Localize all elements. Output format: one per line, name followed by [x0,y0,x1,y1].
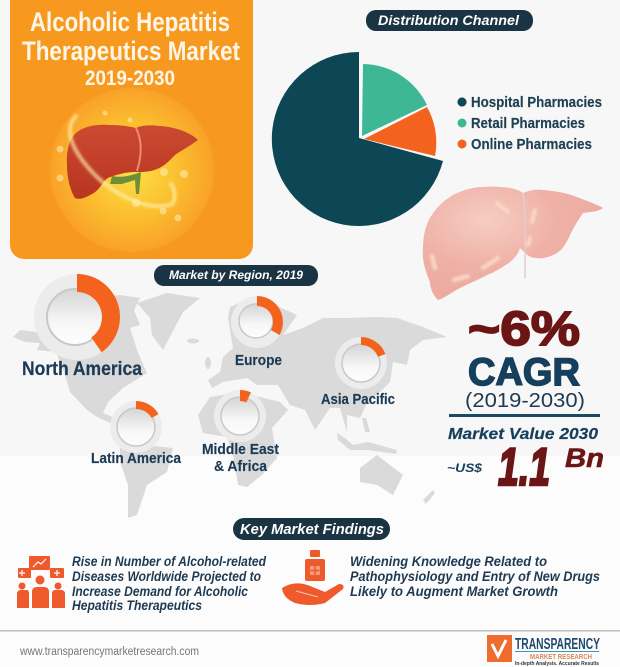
donut: North America [34,274,120,360]
logo: In-depth Analysis. Accurate Results [515,661,599,667]
label: Europe: Europe [235,352,282,369]
stat: market value: 1.1 [498,438,550,497]
logo: MARKET RESEARCH [530,654,592,661]
label: Middle East and Africa: & Africa [214,458,268,475]
finding text: right: Likely to Augment Market Growth [350,584,558,599]
illustration: pale liver [423,187,603,300]
label: Middle East and Africa [202,441,279,475]
title text: Alcoholic Hepatitis [30,7,230,37]
pie chart [272,52,443,226]
label: North America: North America [22,358,142,380]
donut: Latin America [110,401,162,453]
title text: Therapeutics Market [22,36,240,66]
donut: Europe [231,296,283,348]
label: Asia Pacific: Asia Pacific [321,391,395,408]
panel: title [10,0,253,259]
heading: market by region: Market by Region, 2019 [169,268,303,282]
finding text: left: Diseases Worldwide Projected to [72,569,261,584]
finding text: left: Hepatitis Therapeutics [72,598,202,613]
icon: liver [67,116,198,206]
world map [13,293,447,518]
stat: market value: Bn [565,443,604,473]
finding text: left: Rise in Number of Alcohol-related [72,554,267,569]
heading: market by region [154,265,318,286]
logo [487,635,600,667]
heading: distribution channel [366,10,533,31]
legend: Online Pharmacies [471,137,592,153]
label: Middle East and Africa: Middle East [202,441,279,458]
stat: CAGR: ~6% [468,303,580,356]
finding text: right: Widening Knowledge Related to [350,554,547,569]
finding text: right: Pathophysiology and Entry of New Drugs [350,569,600,584]
stat: market value: Market Value 2030 [448,426,598,443]
icon: sparkles [56,110,188,222]
footer url: www.transparencymarketresearch.com [19,646,199,658]
icon: people with chart [17,556,65,608]
stat: market value: ~US$ [447,461,482,475]
title text: 2019-2030 [85,67,175,90]
stat: CAGR: (2019-2030) [465,390,585,412]
finding text: left [72,554,267,613]
stat: CAGR [449,303,600,417]
stat: market value [447,426,604,497]
icon: hand with bottle [282,550,344,605]
stat: CAGR: CAGR [468,351,580,394]
legend: Retail Pharmacies [471,116,585,132]
donut: Asia Pacific [335,337,387,389]
legend: Hospital Pharmacies [471,95,602,111]
finding text: left: Increase Demand for Alcoholic [72,584,248,599]
legend [458,95,602,153]
finding text: right [350,554,600,599]
icon: glowing circle [50,88,214,252]
label: Latin America: Latin America [91,450,182,467]
heading: distribution channel: Distribution Channel [378,13,519,28]
heading: key market findings: Key Market Findings [240,521,384,538]
title text [22,7,240,90]
donut: Middle East and Africa [214,390,266,442]
